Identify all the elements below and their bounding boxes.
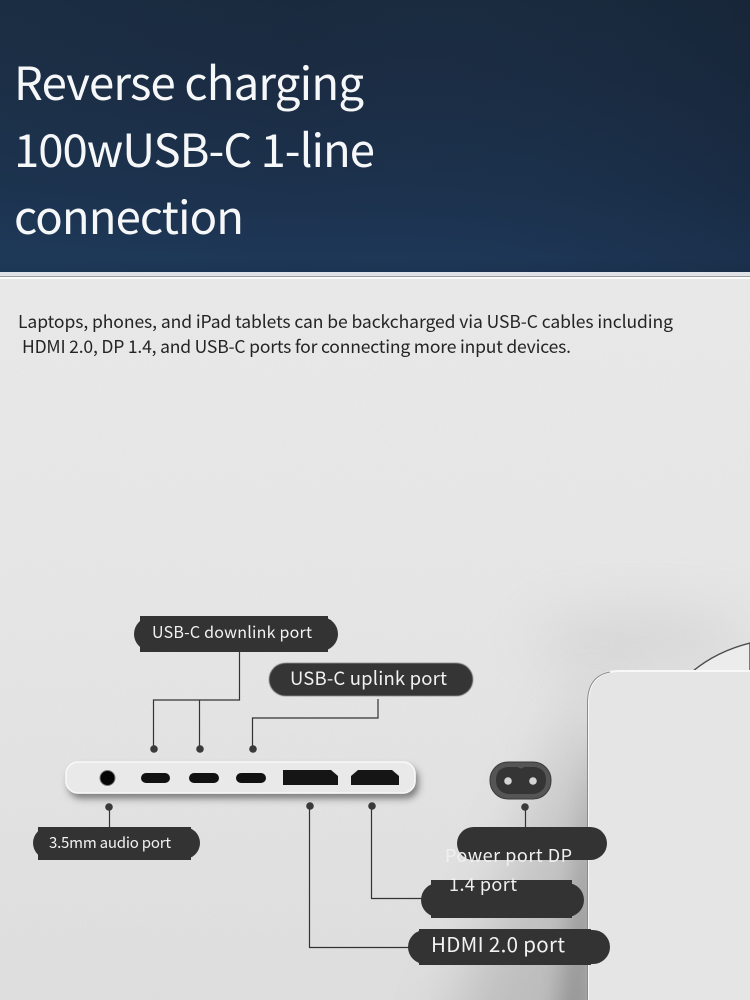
connector: HDMI 2.0 bbox=[306, 802, 409, 948]
title: connection bbox=[14, 182, 244, 248]
label text: Power port DP 1.4 port: Power port DP bbox=[445, 842, 572, 868]
icon: 3.5mm audio jack bbox=[100, 770, 115, 786]
label: HDMI 2.0 port: HDMI 2.0 port bbox=[431, 928, 565, 958]
header band bbox=[0, 0, 750, 279]
label pill: DP port bbox=[421, 880, 584, 918]
description text: Laptops, phones, and iPad tablets can be backcharged via USB-C cables including bbox=[18, 309, 673, 334]
label: 3.5mm audio port: 3.5mm audio port bbox=[49, 832, 171, 853]
label pill: power port bbox=[457, 827, 607, 860]
icon: USB-C port 2 bbox=[189, 773, 219, 783]
monitor back panel bbox=[588, 643, 750, 1000]
label: USB-C uplink port: USB-C uplink port bbox=[290, 665, 447, 691]
connector: USB-C uplink bbox=[249, 699, 378, 753]
label text: Power port DP 1.4 port: 1.4 port bbox=[449, 871, 517, 897]
label: USB-C uplink port bbox=[269, 663, 473, 696]
title: Reverse charging bbox=[14, 48, 364, 114]
connector: DP 1.4 bbox=[368, 802, 422, 898]
label: 3.5mm audio port bbox=[33, 827, 200, 860]
label: HDMI 2.0 port bbox=[408, 928, 610, 965]
connector: audio bbox=[105, 803, 113, 828]
connector: power bbox=[521, 803, 529, 828]
description text bbox=[18, 309, 673, 359]
port strip bbox=[66, 762, 415, 793]
page background bbox=[0, 278, 750, 1000]
icon: USB-C port 3 bbox=[236, 773, 266, 783]
connector: USB-C downlink bbox=[150, 652, 240, 753]
icon: power socket bbox=[490, 762, 551, 799]
label: USB-C downlink port bbox=[134, 616, 338, 652]
icon: DP port bbox=[283, 770, 338, 785]
label: USB-C downlink port: USB-C downlink port bbox=[152, 619, 312, 643]
icon: HDMI port bbox=[351, 770, 399, 785]
description text: HDMI 2.0, DP 1.4, and USB-C ports for connecting more input devices. bbox=[22, 334, 571, 359]
label text: Power port DP 1.4 port bbox=[445, 842, 572, 897]
title bbox=[14, 48, 375, 248]
title: 100wUSB-C 1-line bbox=[14, 115, 375, 181]
icon: USB-C port 1 bbox=[141, 773, 170, 783]
